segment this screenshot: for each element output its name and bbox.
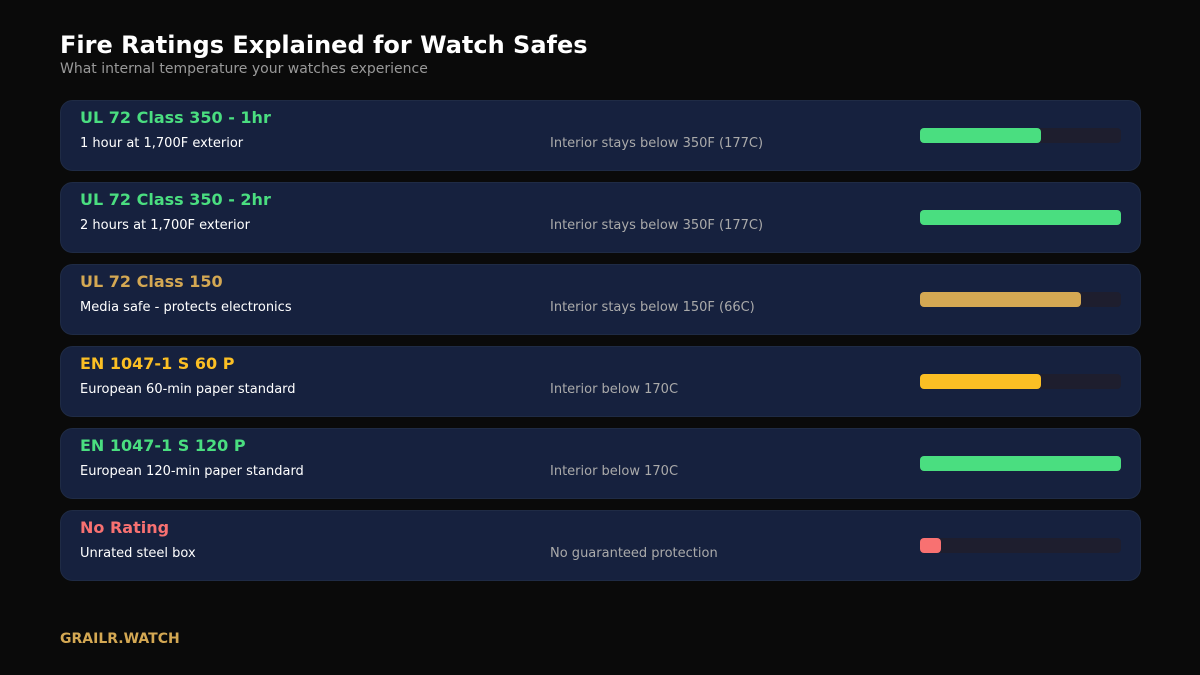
panel: EN 1047-1 S 120 P: European 120-min paper standard (80, 464, 304, 479)
panel: UL 72 Class 350 - 1hr: Interior stays below 350F (177C) (550, 136, 763, 151)
panel: UL 72 Class 350 - 2hr: 2 hours at 1,700F exterior (80, 218, 251, 233)
panel: EN 1047-1 S 120 P: Interior below 170C (550, 464, 678, 479)
panel: No Rating (60, 510, 1140, 580)
panel: No Rating: No Rating (80, 518, 169, 537)
subtitle: What internal temperature your watches experience (60, 61, 428, 77)
panel: UL 72 Class 150: Interior stays below 150F (66C) (550, 300, 755, 315)
panel: EN 1047-1 S 60 P: Interior below 170C (550, 382, 678, 397)
panel: UL 72 Class 150 (60, 264, 1140, 334)
title: Fire Ratings Explained for Watch Safes (60, 31, 588, 59)
panel: EN 1047-1 S 120 P (60, 428, 1140, 498)
panel: EN 1047-1 S 120 P: EN 1047-1 S 120 P (80, 436, 246, 455)
panel: UL 72 Class 350 - 2hr (60, 182, 1140, 252)
panel: EN 1047-1 S 60 P: European 60-min paper standard (80, 382, 296, 397)
panel: UL 72 Class 350 - 1hr: UL 72 Class 350 - 1hr (80, 108, 271, 127)
panel: EN 1047-1 S 60 P: EN 1047-1 S 60 P (80, 354, 235, 373)
panel: UL 72 Class 350 - 2hr: UL 72 Class 350 - 2hr (80, 190, 271, 209)
panel: UL 72 Class 150: UL 72 Class 150 (80, 272, 223, 291)
panel: UL 72 Class 350 - 1hr (60, 100, 1140, 170)
panel: UL 72 Class 350 - 1hr: 1 hour at 1,700F exterior (80, 136, 244, 151)
panel: UL 72 Class 150: Media safe - protects electronics (80, 300, 292, 315)
panel: No Rating: No guaranteed protection (550, 546, 718, 561)
footer brand: GRAILR.WATCH (60, 631, 180, 647)
panel: UL 72 Class 350 - 2hr: Interior stays below 350F (177C) (550, 218, 763, 233)
panel: No Rating: Unrated steel box (80, 546, 196, 561)
panel: EN 1047-1 S 60 P (60, 346, 1140, 416)
